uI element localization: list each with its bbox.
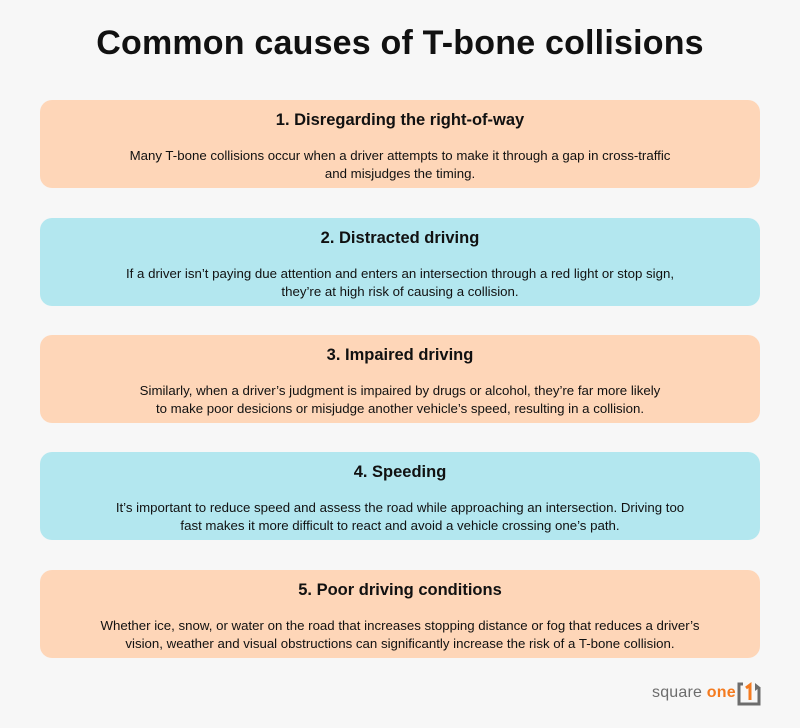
panel: right-of-way: Many T-bone collisions occur when a driver attempts to make it through a gap in cross-traffic	[130, 148, 670, 163]
panel: speeding: fast makes it more difficult to react and avoid a vehicle crossing one’s path.	[180, 518, 620, 533]
panel: impaired: Similarly, when a driver’s judgment is impaired by drugs or alcohol, they’re far more likely	[140, 383, 660, 398]
panel: distracted: they’re at high risk of causing a collision.	[281, 284, 519, 299]
logo: square one	[652, 684, 736, 701]
panel: speeding: 4. Speeding	[354, 463, 446, 481]
title: Common causes of T-bone collisions	[96, 24, 704, 62]
icon: logo mark	[738, 682, 760, 706]
panel: speeding	[40, 452, 760, 540]
panel: conditions	[40, 570, 760, 658]
panel: distracted	[40, 218, 760, 306]
panel: conditions: Whether ice, snow, or water on the road that increases stopping distance or fog that reduces a driver’s	[100, 618, 700, 633]
panel: impaired: 3. Impaired driving	[327, 346, 473, 364]
panel: right-of-way: 1. Disregarding the right-of-way	[276, 111, 524, 129]
panel: right-of-way: and misjudges the timing.	[325, 166, 475, 181]
panel: speeding: It’s important to reduce speed and assess the road while approaching an intersection. Driving too	[116, 500, 684, 515]
panel: conditions: 5. Poor driving conditions	[298, 581, 502, 599]
panel: impaired: to make poor desicions or misjudge another vehicle’s speed, resulting in a collision.	[156, 401, 644, 416]
panel: conditions: vision, weather and visual obstructions can significantly increase the risk of a T-bone collision.	[125, 636, 675, 651]
panel: distracted: 2. Distracted driving	[321, 229, 479, 247]
panel: distracted: If a driver isn’t paying due attention and enters an intersection through a red light or stop sign,	[126, 266, 674, 281]
panel: impaired	[40, 335, 760, 423]
panel: right-of-way	[40, 100, 760, 188]
